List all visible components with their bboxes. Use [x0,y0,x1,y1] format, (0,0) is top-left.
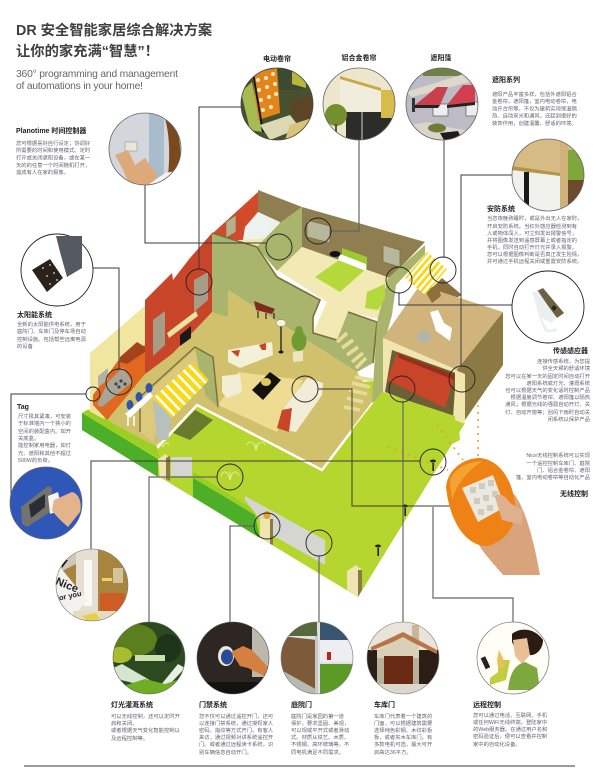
heading: 庭院门 [291,700,312,709]
text: planotime [16,139,91,176]
text: 连接传感系统，为您提 [537,357,591,365]
hob [114,379,127,389]
text: Nice无线控制系统可以实现 [526,451,591,459]
red wall window [153,311,165,356]
heading: 无线控制 [560,489,588,498]
title: 让你的家充满“智慧”！ [16,42,159,60]
fireplace [180,326,191,346]
panel: tag [10,404,82,539]
photo: solar panel [21,234,93,306]
label: 遮阳篷 [430,53,452,62]
lower stairs [344,377,373,410]
heading: planotime: Planotime 时间控制器 [16,126,86,135]
text [487,214,582,265]
post two [260,511,273,545]
kitchen top cabinet [120,342,145,364]
mantel [167,311,198,338]
heading: 远程控制 [473,700,501,709]
panel: remote control [473,622,549,748]
text: 开启安防系统。当红外感应器检测到有 [487,222,577,230]
roof table [417,332,431,342]
text: 可以规或平开式或者滑动 [291,726,349,734]
long sofa [277,378,323,432]
bedroom window 2 [383,245,400,267]
text: 关底盒。 [18,434,39,442]
text [199,712,274,756]
text [291,712,350,756]
garden lamps [375,460,436,556]
text [374,712,433,756]
text: 人或物体闯入，可立刻发出报警信号， [487,229,577,237]
panel: lighting and irrigation [108,622,185,742]
photo: sensor device [512,271,584,343]
right sage wall [372,245,425,403]
entry sage wall [195,347,218,407]
sprinklers [157,442,265,480]
text: planotime: 造成有人在家的假像。 [16,168,69,176]
mid wall top [193,472,258,515]
potted plant [292,326,306,362]
sofa [228,342,273,368]
text: 并可通过手机远程关闭或重置安防系统。 [487,257,582,265]
bath tub [243,212,280,240]
title [16,21,213,60]
garage door top [397,353,455,380]
floor lamp [276,320,286,354]
text: 500W的负荷。 [18,456,53,464]
bedroom floor [277,247,390,340]
text [473,711,548,748]
text: 金卷帘，遮阳篷，室内电动卷帘，电 [492,97,577,105]
bathroom wall [213,192,258,240]
text: 或者根据天气变化智能控制以 [111,726,181,734]
photo: nice interior [54,549,128,622]
text: 车库门代表着一个建筑的 [374,712,432,720]
text: 通风；根据光线的强弱自动开灯、关 [505,400,591,408]
rug [218,372,303,432]
photo: shutter on clad house [512,139,584,211]
garage front wall [383,338,463,423]
panel: sensors [505,271,591,423]
mid wall face [193,478,260,538]
panel: nice lighting [54,549,128,622]
lawn shadow [173,410,213,440]
left wall top [82,410,160,459]
text: 于标准墙内一个狭小的 [18,419,71,427]
post one [158,454,170,481]
signal dots [388,405,478,470]
text: 别车辆信息自动开门。 [199,748,252,756]
red brick wall [145,233,212,374]
title: DR 安全智能家居综合解决方案 [16,21,213,39]
text: 门、铝合金卷帘、遮阳 [537,466,590,474]
subtitle: 360° programming and management [16,69,178,80]
photo: sprinkler garden [108,622,185,694]
text: 板，或者实木车库门。有 [374,733,432,741]
text: 装饰作用，创建温馨、舒适的环境。 [492,119,577,127]
text: 篷、室内电动卷帘等自动化产品 [516,473,590,481]
label: 电动卷帘 [263,54,291,63]
text: 门。或者通过远程读卡系统，识 [199,740,273,748]
bedroom back wall [302,207,425,278]
text: 您可以通过电话、互联网、手机 [473,711,548,719]
text: 不锈钢、高环玻璃等。不 [291,740,350,748]
heading: 安防系统 [487,204,515,213]
panel: electric roller blind [241,54,313,140]
photo: woman with phone [477,622,549,694]
text: planotime: 您可根据喜好自行设定，协调好 [16,139,91,147]
living room floor [108,290,375,470]
text: 也可以根据天气的变化适时控制产品 [505,386,590,394]
text: planotime: 所需要的时间和使用模式。定时 [16,146,91,154]
text: 选择纯色彩钢、木纹彩板 [374,726,433,734]
photo: orange patterned blind [241,68,313,140]
entry wall outline [140,347,218,432]
subtitle: of automations in your home! [16,81,143,92]
garage door [387,353,455,408]
text: 并将图像发送到遥感屏幕上或者指定的 [487,236,577,244]
text: 庭院门、车库门及停车场自动 [17,327,86,335]
text: 热、自动采光和通风，还起到很好的 [492,112,577,120]
kitchen table [125,392,153,426]
text: 空间的装配盒内。如开 [18,427,72,435]
stair wall outline [348,312,377,363]
panel: aluminium roller shutter [323,53,395,140]
text: 一个遥控控制车库门、庭院 [526,459,591,467]
kitchen cabinets [93,345,145,420]
bedroom armchair [365,284,385,310]
text: 启高达36平方。 [374,748,412,756]
dining chairs [126,383,152,410]
entry door [153,400,172,440]
text: 保护，要求坚固、美观， [291,719,349,727]
heading: 传感感应器 [553,346,588,355]
connector lines [11,107,513,622]
text: 可以无线控制，还可以定时开 [111,712,181,720]
text: 全新的太阳能供电系统，用于 [17,320,86,328]
text: 遮阳产品丰富多样，包括外遮阳铝合 [492,90,577,98]
panel: wireless control [446,451,591,575]
heading: 灯光灌溉系统 [111,700,153,709]
isometric house illustration [82,190,503,597]
text [516,451,591,481]
photo: house with red awnings [406,68,478,140]
lounge chair [430,310,452,341]
bed [315,248,367,292]
photo: nice interior: for you [56,589,83,603]
text: 密码、指纹等方式开门。有客人 [199,726,274,734]
text: 光、遮阳和其他不超过 [18,449,72,457]
garage lawn [352,392,460,470]
text: 手机，同时自动打开灯光并录入报警。 [487,243,577,251]
panel: security [487,139,584,265]
right awning shadow [425,278,462,305]
bathroom back wall [258,190,302,223]
text: 来访，通过视频对讲系统遥控开 [199,733,274,741]
back left wall [90,304,147,425]
text: 能控制家用电器，如灯 [18,441,72,449]
text: 庭院门是家园的第一道 [291,712,345,720]
panel: garage door [367,622,439,756]
text: 尺寸极其紧凑，可安装 [18,412,72,420]
photo: garage [367,622,439,694]
wall outline [212,233,337,340]
range hood [98,368,108,387]
text [505,357,591,423]
post three [347,565,362,597]
panel: solar [17,234,93,350]
left wall face [82,413,158,477]
text: 动开合帘等，不仅为建筑实现保温隔 [492,104,577,112]
text: 控制设施。包括帮些远离电源 [17,335,87,343]
heading: 门禁系统 [199,700,227,709]
coffee table [252,372,281,400]
partition wall [257,207,302,271]
text [17,320,87,350]
photo: wooden gate [281,622,353,694]
text: 启和关闭。 [111,719,138,727]
subtitle [16,69,178,92]
kitchen counter [97,367,132,407]
text: 以连接门禁系统，通过授权家人 [199,719,274,727]
text: 供全天候的舒适环境 [542,364,591,372]
heading: 遮阳系列 [492,75,520,84]
text: planotime: 天的的任意一个时间随机打开， [16,161,90,169]
garage right wall [457,312,503,423]
text: 或任何WiFi无线终端，登陆家中 [473,718,547,726]
label: 铝合金卷帘 [342,53,376,62]
panel: awning [406,53,478,140]
central sage wall [212,233,377,372]
gate two [245,496,325,565]
repeat awning shadow on roof [425,284,441,303]
text: 同电机满足不同需求。 [291,748,344,756]
dining table [254,301,275,319]
heading: Tag [17,404,29,411]
lawn [82,380,465,597]
text: 及远程控制等。 [111,734,148,742]
text: 家中的自动化设备。 [473,740,521,748]
photo: keypad with hand [197,622,269,694]
panel: access control [197,622,274,756]
garage opening [385,350,456,418]
text: 灯、自动开窗等；刮风下雨时自动关 [505,408,591,416]
bedroom window 1 [307,220,330,243]
text: 式。材质从铁艺、木质、 [291,733,349,741]
text: 的设备 [17,342,34,350]
text: 根据温度调节卷帘、遮阳篷以隔热 [511,393,591,401]
photo: wall switch [10,467,82,539]
text: 当您夜晚熟睡时，或是外出无人在家时， [487,214,582,222]
text [18,412,72,464]
text [111,712,181,742]
upper stairs [337,333,366,368]
photo: nice interior: Nice [54,576,80,595]
gate one [171,457,192,476]
text: 闭系统以保护产品 [548,415,590,423]
photo: shutter window [323,68,395,140]
garage post [455,370,465,424]
text: 的Web服务器。在通过用户名和 [473,725,547,733]
bathroom window [226,215,236,238]
heading: 太阳能系统 [17,310,52,319]
icon: orange remote in hand [446,458,540,575]
bedside lamp [330,251,340,257]
text: 多款电机可选，最大可开 [374,740,433,748]
text: 门面，可以根据建筑需要 [374,719,432,727]
panel: awning series text [492,75,577,127]
bottom rule [24,765,575,767]
text: 您不仅可以通过遥控开门，还可 [199,712,274,720]
photo: timer on wall [109,113,181,185]
house border [157,400,375,470]
right yellow awning [405,252,447,295]
bathroom floor [240,222,280,250]
front yellow awning [153,362,209,418]
panel: planotime [16,113,181,185]
heading: 车库门 [374,700,395,709]
text: 密码验证后，便可以查看并控制 [473,732,547,740]
panel: garden gate [281,622,353,756]
text: 遮阳系统或灯光、灌溉系统 [526,379,591,387]
text [492,90,577,127]
text: planotime: 打开或关闭遮阳设备，或在某一 [16,154,91,162]
text: 您可以根据图像判断是否真正发生险情， [487,250,582,258]
text: 您可以在某一天的固定时间自动打开 [505,372,591,380]
garage roof [383,285,503,370]
armchair [222,374,242,398]
entry tan wall [140,350,205,442]
chimney window [194,272,208,312]
locator circles [86,218,475,556]
